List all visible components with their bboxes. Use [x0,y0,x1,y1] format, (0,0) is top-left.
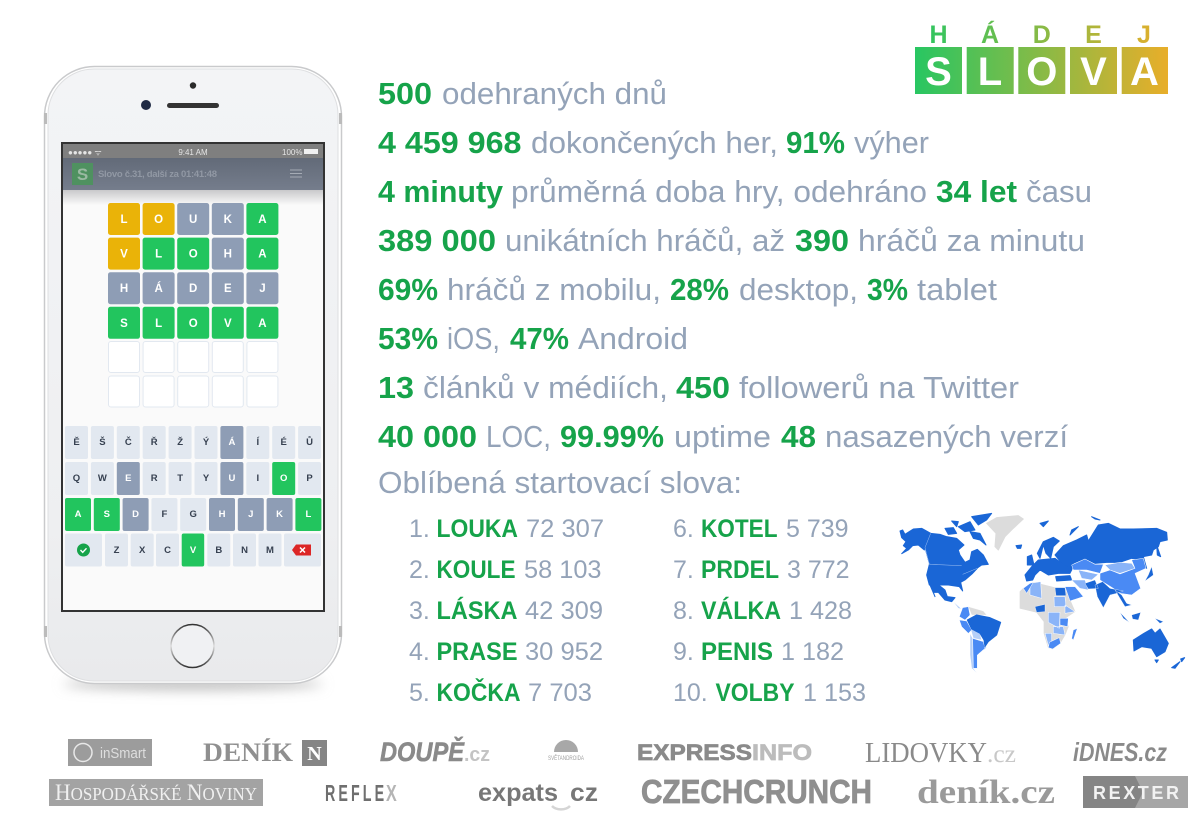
stat: unique players: hráčů za minutu [858,223,1085,258]
stat: code and deployments: LOC, [486,419,551,454]
stat: operating systems: 47% [510,321,569,356]
phone screen [62,143,324,611]
list of starting words 1-5: 72 307 [526,515,604,543]
word grid: E [224,283,232,295]
stat: code and deployments [378,419,1068,454]
stat: operating systems: Android [578,321,688,356]
map: Europe, Asia, Africa, Australia [1020,517,1185,668]
logo: iDnes.cz: iDNES.cz [1073,737,1167,767]
stat: average game time: času [1026,174,1092,209]
keyboard: Y [203,473,210,484]
word grid: H [120,283,128,295]
logo: Hádej slova: J [1137,21,1151,49]
logo: Lidovky.cz: LIDOVKY [865,737,987,769]
logo: Lidovky.cz: .cz [987,741,1016,768]
status bar: 9:41 AM [178,148,208,157]
keyboard: E [125,473,131,484]
logo: Expats.cz: cz [570,779,598,807]
stat: operating systems: 53% [378,321,438,356]
logo: Hádej slova: Á [981,20,999,49]
list of starting words 1-5: LOUKA [436,515,518,543]
logo: Hádej slova: V [1080,50,1107,94]
word grid: A [258,318,267,330]
word grid: K [224,214,233,226]
list of starting words 1-5: 30 952 [525,638,603,666]
logo: Rexter [1083,776,1188,808]
word grid: U [189,214,197,226]
stat: unique players: 390 [795,223,849,258]
logo: Hádej slova: H [929,21,948,49]
stat: media and followers: článků v médiích, [423,370,668,405]
keyboard: O [280,473,287,484]
word grid: J [259,283,266,295]
logo: Deník N: N [307,743,322,765]
keyboard: Q [73,473,80,484]
stat: devices: hráčů z mobilu, [447,272,661,307]
list of starting words 1-5: 4. [409,638,430,666]
list of starting words 1-5 [409,515,604,707]
keyboard: T [177,473,183,484]
logo: inSmart: inSmart [100,745,147,762]
keyboard [65,426,321,566]
keyboard: G [190,509,197,520]
map: Americas [900,513,1023,673]
heading: favourite starting words: Oblíbená startovací slova: [378,465,742,500]
stat: media and followers: 13 [378,370,414,405]
word grid [108,203,278,407]
list of starting words 1-5: LÁSKA [436,596,518,625]
list of starting words 1-5: 3. [409,597,430,625]
word grid: V [120,249,128,261]
list of starting words 6-10: 10. [673,679,708,707]
keyboard: N [241,545,248,556]
keyboard: L [305,509,311,520]
list of starting words 6-10: 5 739 [786,515,848,543]
logo: Hádej slova: E [1085,21,1102,49]
stat: media and followers [378,370,1019,405]
stat: unique players: unikátních hráčů, až [505,223,785,258]
home button [171,624,214,668]
word grid: H [224,249,232,261]
keyboard: I [256,473,259,484]
logo: Svět Androida [548,740,584,762]
stat: media and followers: followerů na Twitter [739,370,1019,405]
stat: unique players: 389 000 [378,223,496,258]
keyboard: V [190,545,197,556]
word grid: O [189,249,198,261]
keyboard: M [266,545,274,556]
logo: Hádej slova: L [978,50,1002,94]
stat: code and deployments: nasazených verzí [825,419,1068,454]
stat: finished games: 4 459 968 [378,125,522,160]
logo: CzechCrunch: CZECHCRUNCH [641,773,872,810]
list of starting words 6-10: 9. [673,638,694,666]
stat: devices [378,272,997,307]
list of starting words 1-5: KOČKA [436,677,520,707]
keyboard: R [151,473,158,484]
stat: average game time: 4 minuty [378,174,504,209]
keyboard: Ž [177,436,183,448]
logo: Hádej slova [915,20,1168,94]
logo: Hospodářské noviny: HOSPODÁŘSKÉ NOVINY [55,780,257,805]
logo: Hádej slova: O [1026,50,1057,94]
stat: finished games: 91% [786,125,845,160]
logo: Deník N: DENÍK [203,738,294,767]
logo: Expats.cz [478,779,598,809]
list of starting words 1-5: PRASE [436,638,518,666]
keyboard: Ř [151,436,158,448]
keyboard: W [98,473,107,484]
keyboard: A [75,509,82,520]
list of starting words 6-10: 7. [673,556,694,584]
word grid: D [189,283,197,295]
keyboard: F [161,509,167,520]
list of starting words 1-5: 58 103 [524,556,602,584]
logo: ExpressInfo: EXPRESS [637,740,752,765]
stat: code and deployments: uptime [674,419,771,454]
logo: Deník.cz: deník.cz [917,774,1055,811]
logo: Doupě.cz: DOUPĚ [380,736,465,767]
keyboard: K [276,509,283,520]
stat: code and deployments: 48 [781,419,816,454]
stat: average game time [378,174,1092,209]
keyboard: B [215,545,222,556]
app header: S [77,165,88,184]
keyboard: S [104,509,110,520]
statistics text block [378,76,1092,454]
stat: days played: odehraných dnů [442,76,667,111]
stat: devices: desktop, [739,272,858,307]
list of starting words 6-10: 1 182 [781,638,844,666]
stat: operating systems: iOS, [447,321,500,356]
keyboard: É [281,437,287,448]
list of starting words 6-10: 1 428 [789,597,852,625]
app header: Slovo č.31, další za 01:41:48 [98,169,217,180]
keyboard: Ý [203,436,210,448]
keyboard: Ě [73,436,80,448]
stat: devices: 69% [378,272,438,307]
media logos row 1 [68,736,1167,769]
list of starting words 1-5: 2. [409,556,430,584]
list of starting words 6-10: 6. [673,515,694,543]
keyboard: Č [125,436,132,448]
list of starting words 6-10: PRDEL [701,556,779,584]
word grid: L [120,214,128,226]
logo: Hádej slova: A [1130,50,1159,94]
logo: Svět Androida: SVĚTANDROIDA [548,754,584,762]
keyboard: Ů [306,436,313,448]
keyboard: X [139,545,146,556]
logo: Reflex: X [386,781,397,807]
keyboard: H [219,509,226,520]
stat: devices: 28% [670,272,729,307]
list of starting words 6-10 [673,515,866,707]
stat: media and followers: 450 [676,370,730,405]
list of starting words 6-10: KOTEL [701,515,778,543]
word grid: Á [154,282,163,295]
list of starting words 6-10: 8. [673,597,694,625]
keyboard: U [228,473,235,484]
status bar: ●●●●● ᯤ [68,148,102,157]
logo: Expats.cz: expats [478,779,558,807]
logo: ExpressInfo: INFO [752,740,812,765]
stat: code and deployments: 40 000 [378,419,477,454]
stat: operating systems [378,321,688,356]
word grid: S [120,318,128,330]
keyboard: J [248,509,253,520]
stat: devices: tablet [917,272,997,307]
keyboard: Á [228,437,235,448]
logo: Rexter: REXTER [1093,783,1179,803]
word grid: L [155,249,162,261]
stat: days played: 500 [378,76,432,111]
status bar: 100% [282,148,302,157]
list of starting words 1-5: 7 703 [528,679,592,707]
stat: unique players [378,223,1085,258]
logo: inSmart [68,739,152,766]
status bar [63,144,323,158]
keyboard: Z [114,545,120,556]
stat: finished games: výher [854,125,929,160]
stat: average game time: průměrná doba hry, odehráno [511,174,927,209]
list of starting words 1-5: 42 309 [525,597,603,625]
list of starting words 6-10: VOLBY [716,679,795,707]
list of starting words 6-10: PENIS [701,638,773,666]
phone mockup [44,66,342,690]
stat: code and deployments: 99.99% [560,419,664,454]
stat: devices: 3% [867,272,908,307]
keyboard: D [132,509,139,520]
word grid: A [258,249,267,261]
keyboard: Í [256,437,259,448]
logo: ExpressInfo [637,740,812,765]
list of starting words 6-10: VÁLKA [701,596,781,625]
word grid: L [155,318,162,330]
media logos row 2 [49,773,1188,811]
logo: Deník N [203,738,327,767]
logo: Hádej slova: S [925,50,952,94]
list of starting words 6-10: 1 153 [803,679,866,707]
logo: Doupě.cz: .cz [464,744,490,766]
stat: finished games: dokončených her, [531,125,778,160]
stat: average game time: 34 let [936,174,1017,209]
word grid: O [189,318,198,330]
list of starting words 1-5: KOULE [436,556,516,584]
list of starting words 1-5: 1. [409,515,430,543]
world map [900,513,1185,673]
stat: finished games [378,125,929,160]
word grid: O [154,214,163,226]
logo: Reflex: REFLE [325,782,387,807]
word grid: V [224,318,232,330]
keyboard: P [306,473,313,484]
keyboard: Š [99,436,106,448]
logo: Hádej slova: D [1033,21,1051,49]
map: Africa base [1020,582,1075,649]
app header [63,158,323,205]
list of starting words 6-10: 3 772 [787,556,850,584]
keyboard: C [164,545,171,556]
list of starting words 1-5: 5. [409,679,430,707]
word grid: A [258,214,267,226]
